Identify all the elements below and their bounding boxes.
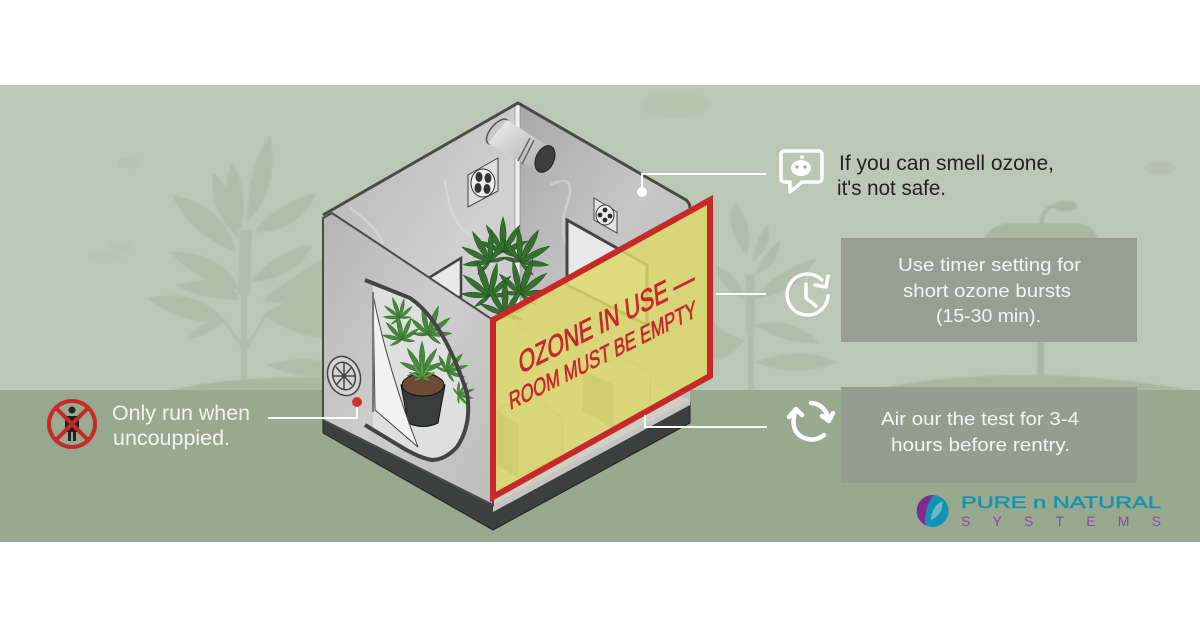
logo	[917, 493, 1161, 529]
tip box: air out	[841, 387, 1137, 483]
tent base	[323, 403, 690, 530]
background: right plant silhouette	[712, 202, 838, 390]
tent front-left wall	[323, 213, 493, 505]
corner pole	[515, 105, 520, 305]
door rim	[365, 280, 468, 460]
back-right wall window	[567, 220, 647, 325]
door flap	[373, 295, 418, 447]
sign subheading: ROOM MUST BE EMPTY	[508, 296, 697, 416]
tent floor	[400, 330, 690, 505]
tent back-right wall	[518, 103, 690, 400]
background: lower ground band	[0, 390, 1200, 542]
icon: timer clock	[787, 274, 828, 315]
round wall vent	[322, 352, 366, 400]
back-right wall vent panel	[594, 198, 617, 233]
tip text: smell ozone: it's not safe.	[837, 177, 946, 200]
tip box: timer	[841, 238, 1137, 342]
tip box: timer: Use timer setting for	[898, 254, 1081, 275]
tip box: timer: short ozone bursts	[903, 280, 1071, 301]
ozone generator, left	[497, 393, 562, 477]
callout leader: unoccupied	[268, 397, 362, 418]
sign panel	[493, 200, 710, 497]
faint ozone wisps	[350, 180, 570, 250]
tip box: timer: (15-30 min).	[936, 305, 1041, 326]
back-left wall window	[427, 258, 461, 297]
plant pot	[401, 380, 445, 426]
background: right tree silhouette	[640, 92, 1190, 390]
tent back-left wall	[325, 103, 518, 400]
central cannabis plant	[450, 216, 563, 321]
tent top rim	[323, 103, 690, 215]
callout leader: timer	[716, 293, 766, 295]
tip text: only run when unoccupied: uncouppied.	[113, 427, 230, 450]
back-left wall fan panel	[468, 158, 498, 207]
icon: no person	[49, 401, 95, 447]
tip text: only run when unoccupied: Only run when	[112, 402, 250, 425]
ozone generator, right	[583, 357, 650, 428]
tent illustration	[322, 103, 690, 530]
background: left plant silhouette	[88, 135, 340, 390]
icon: chat bubble with face	[781, 151, 822, 192]
background: upper sage band	[0, 85, 1200, 390]
logo wordmark: PURE n NATURAL	[961, 493, 1161, 512]
tip text: only run when unoccupied	[112, 402, 250, 450]
icon: refresh arrows	[789, 403, 833, 440]
callout leader: smell	[637, 174, 766, 197]
tip box: air out: hours before rentry.	[891, 434, 1070, 455]
tip text: smell ozone	[837, 152, 1054, 200]
warning sign	[493, 200, 710, 497]
sign heading: OZONE IN USE —	[517, 260, 697, 381]
duct cylinder	[482, 116, 559, 175]
logo mark	[917, 495, 949, 527]
door opening with plant	[365, 280, 479, 460]
tip box: air out: Air our the test for 3-4	[881, 408, 1079, 429]
callout leader: air out	[645, 415, 767, 427]
tip text: smell ozone: If you can smell ozone,	[839, 152, 1054, 175]
logo tagline: SYSTEMS	[961, 513, 1161, 529]
